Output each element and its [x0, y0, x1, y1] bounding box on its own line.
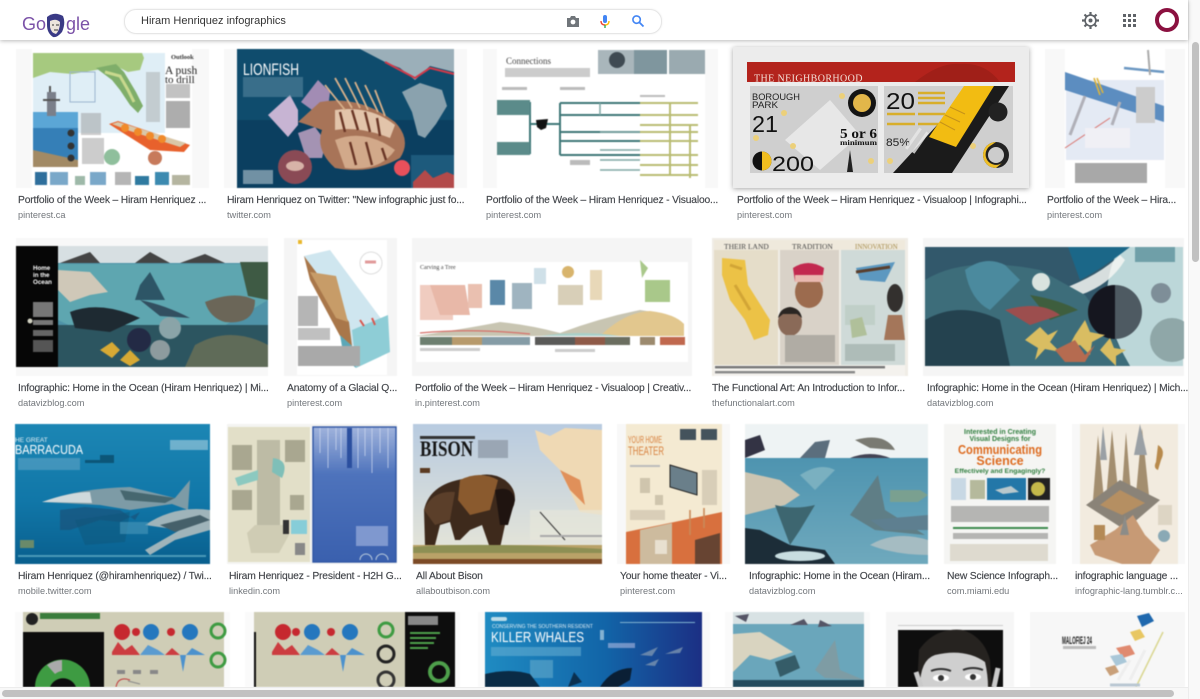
- thumbnail: THEIR LAND: [724, 242, 769, 251]
- result: Communicating Science: [944, 424, 1058, 596]
- thumbnail: CONSERVING THE SOUTHERN RESIDENT: [492, 624, 593, 630]
- title: New Science Infograph...: [947, 571, 1058, 582]
- thumbnail: [14, 423, 211, 565]
- result: Malofiej 24: [1030, 612, 1185, 687]
- thumbnail: INNOVATION: [855, 243, 898, 251]
- title: Infographic: Home in the Ocean (Hiram Henriquez) | Mi...: [18, 383, 269, 394]
- thumbnail: LIONFISH: [243, 60, 299, 79]
- title: Hiram Henriquez on Twitter: "New infographic just fo...: [227, 195, 464, 206]
- source: datavizblog.com: [749, 586, 815, 596]
- thumbnail: THEATER: [628, 444, 664, 458]
- thumbnail: minimum: [840, 139, 877, 147]
- thumbnail: [236, 48, 456, 189]
- vertical scrollbar: [1188, 0, 1200, 699]
- result: Functional Art: [712, 238, 908, 408]
- thumbnail: 5 or 6: [840, 127, 877, 142]
- thumbnail: Effectively and Engagingly?: [955, 468, 1045, 475]
- thumbnail: [412, 424, 603, 565]
- thumbnail: [944, 424, 1056, 564]
- icon: apps grid: [1123, 14, 1136, 27]
- title: Infographic: Home in the Ocean (Hiram Henriquez) | Mich...: [927, 383, 1188, 394]
- icon: magnifier: [632, 15, 644, 28]
- thumbnail: Interested in Creating: [964, 429, 1036, 436]
- result: The Neighborhood (hovered): [730, 44, 1032, 220]
- thumbnail: 20: [886, 88, 915, 114]
- thumbnail: KILLER WHALES: [491, 629, 584, 646]
- thumbnail: Visual Designs for: [970, 436, 1031, 443]
- result: Home in the Ocean 4: [725, 612, 870, 687]
- source: in.pinterest.com: [415, 398, 480, 408]
- title: Portfolio of the Week – Hiram Henriquez ...: [18, 195, 206, 206]
- result: Bison: [412, 424, 603, 596]
- thumbnail: [1064, 50, 1165, 184]
- thumbnail: [15, 612, 230, 687]
- search query text: Hiram Henriquez infographics: [141, 15, 286, 27]
- result: Space station: [1047, 50, 1176, 220]
- title: Portfolio of the Week – Hiram Henriquez - Visualoop | Infographi...: [737, 195, 1027, 206]
- thumbnail: [733, 47, 1029, 188]
- thumbnail: Carving a Tree: [420, 265, 456, 271]
- result: Glacial Quake: [284, 238, 397, 408]
- search box: [124, 9, 662, 34]
- thumbnail: [478, 612, 710, 687]
- source: com.miami.edu: [947, 586, 1009, 596]
- thumbnail: HE GREAT: [15, 437, 48, 444]
- title: Portfolio of the Week – Hiram Henriquez - Visualoop | Creativ...: [415, 383, 691, 394]
- result: Outlook push to drill: [18, 52, 206, 220]
- source: allaboutbison.com: [416, 586, 490, 596]
- thumbnail: BOROUGH: [752, 92, 800, 103]
- title: Infographic: Home in the Ocean (Hiram...: [749, 571, 930, 582]
- thumbnail: to drill: [165, 74, 195, 86]
- thumbnail: Science: [976, 454, 1024, 468]
- thumbnail: PARK: [752, 100, 779, 111]
- result: Making Connections: [486, 49, 718, 220]
- title: infographic language ...: [1075, 571, 1178, 582]
- horizontal scrollbar: [0, 687, 1188, 699]
- logo: Google doodle with portrait: Go: [22, 14, 46, 34]
- result: portrait of Hiram Henriquez: [886, 612, 1014, 687]
- result: Jobs and the economy 1: [22, 612, 228, 687]
- thumbnail: [1079, 424, 1179, 565]
- thumbnail: Connections: [506, 56, 551, 66]
- title: Portfolio of the Week – Hiram Henriquez - Visualoo...: [486, 195, 718, 206]
- thumbnail: [924, 238, 1185, 376]
- thumbnail: [1030, 612, 1185, 687]
- source: pinterest.com: [620, 586, 675, 596]
- title: Your home theater - Vi...: [620, 571, 727, 582]
- source: datavizblog.com: [927, 398, 993, 408]
- title: Anatomy of a Glacial Q...: [287, 383, 397, 394]
- thumbnail: BARRACUDA: [15, 443, 84, 457]
- source: pinterest.com: [486, 210, 541, 220]
- thumbnail: Home: [33, 265, 51, 272]
- logo: Google doodle with portrait: [22, 14, 90, 38]
- title: Hiram Henriquez - President - H2H G...: [229, 571, 402, 582]
- thumbnail: YOUR HOME: [628, 435, 662, 446]
- thumbnail: [744, 424, 929, 565]
- thumbnail: [496, 49, 706, 179]
- source: pinterest.ca: [18, 210, 66, 220]
- thumbnail: [245, 612, 460, 687]
- result: Home in the Ocean 2: [924, 238, 1188, 408]
- thumbnail: 21: [752, 111, 778, 137]
- result: Your home theater: [620, 424, 727, 596]
- icon: settings gear: [1082, 12, 1099, 29]
- thumbnail: [15, 245, 269, 368]
- result: H2H Tower and blue chart: [227, 424, 402, 596]
- thumbnail: THE NEIGHBORHOOD: [754, 74, 863, 84]
- thumbnail: 200: [772, 153, 814, 176]
- title: Portfolio of the Week – Hira...: [1047, 195, 1176, 206]
- source: pinterest.com: [1047, 210, 1102, 220]
- logo: Google doodle with portrait: gle: [66, 14, 90, 34]
- result: Home in the Ocean 3: [744, 424, 930, 596]
- result: Jobs and the economy 2: [245, 612, 460, 687]
- icon: avatar ring: [1155, 8, 1179, 32]
- thumbnail: Outlook: [171, 54, 194, 61]
- thumbnail: [725, 612, 870, 687]
- result: Killer Whales: [478, 612, 710, 687]
- source: mobile.twitter.com: [18, 586, 92, 596]
- thumbnail: in the: [33, 272, 50, 279]
- thumbnail: [32, 52, 198, 186]
- search header bar: [0, 0, 1188, 40]
- source: datavizblog.com: [18, 398, 84, 408]
- source: pinterest.com: [737, 210, 792, 220]
- source: pinterest.com: [287, 398, 342, 408]
- thumbnail: [227, 424, 398, 564]
- thumbnail: [412, 238, 692, 376]
- thumbnail: [886, 612, 1014, 687]
- thumbnail: TRADITION: [792, 242, 833, 251]
- result: Carving a Tree: [412, 238, 692, 408]
- title: All About Bison: [416, 571, 483, 582]
- source: infographic-lang.tumblr.c...: [1075, 586, 1183, 596]
- source: thefunctionalart.com: [712, 398, 795, 408]
- icon: camera: [567, 16, 579, 27]
- thumbnail: Communicating: [958, 443, 1042, 457]
- result: Sagrada Familia: [1075, 424, 1183, 596]
- thumbnail: [625, 424, 723, 565]
- thumbnail: Ocean: [33, 279, 52, 286]
- thumbnail: BISON: [420, 436, 473, 461]
- icon: microphone: [600, 15, 610, 28]
- title: Hiram Henriquez (@hiramhenriquez) / Twi...: [18, 571, 212, 582]
- thumbnail: 85%: [886, 137, 910, 149]
- thumbnail: [284, 238, 396, 376]
- thumbnail: [712, 238, 908, 376]
- result: Great Barracuda: [14, 423, 212, 596]
- result: Lionfish: [227, 48, 464, 220]
- thumbnail: A push: [165, 65, 198, 77]
- thumbnail: MALOFIEJ 24: [1062, 635, 1092, 647]
- result: Home in the Ocean 1: [15, 245, 269, 408]
- source: twitter.com: [227, 210, 271, 220]
- source: linkedin.com: [229, 586, 280, 596]
- title: The Functional Art: An Introduction to Infor...: [712, 383, 905, 394]
